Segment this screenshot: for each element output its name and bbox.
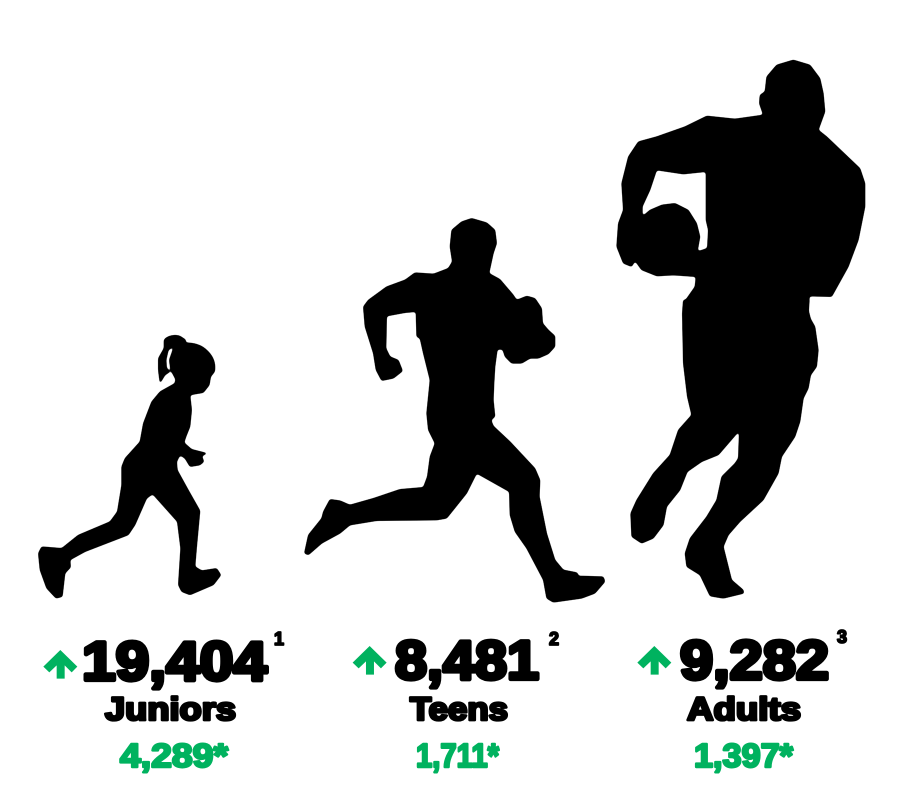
icon: girl running silhouette: [38, 335, 221, 598]
footnote marker 2: 2: [549, 629, 559, 649]
icon: up arrow: [43, 650, 77, 679]
icon: adult carrying ball silhouette: [617, 60, 865, 598]
number: juniors increase: 4,289*: [120, 737, 228, 774]
icon: up arrow: [637, 646, 671, 675]
footnote marker 1: 1: [274, 629, 284, 649]
panel: adults: [617, 60, 865, 774]
number: adults total: 9,282: [680, 629, 829, 691]
label: teens: Teens: [410, 691, 508, 727]
icon: teen running with ball silhouette: [304, 218, 605, 602]
footnote marker 3: 3: [837, 627, 847, 647]
number: adults increase: 1,397*: [694, 737, 793, 774]
label: juniors: Juniors: [105, 691, 236, 727]
panel: teens: [304, 218, 605, 774]
number: teens total: 8,481: [395, 629, 539, 691]
label: adults: Adults: [687, 691, 801, 727]
icon: up arrow: [353, 646, 387, 675]
panel: juniors: [38, 335, 284, 774]
number: juniors total: 19,404: [82, 630, 267, 692]
number: teens increase: 1,711*: [416, 737, 499, 774]
